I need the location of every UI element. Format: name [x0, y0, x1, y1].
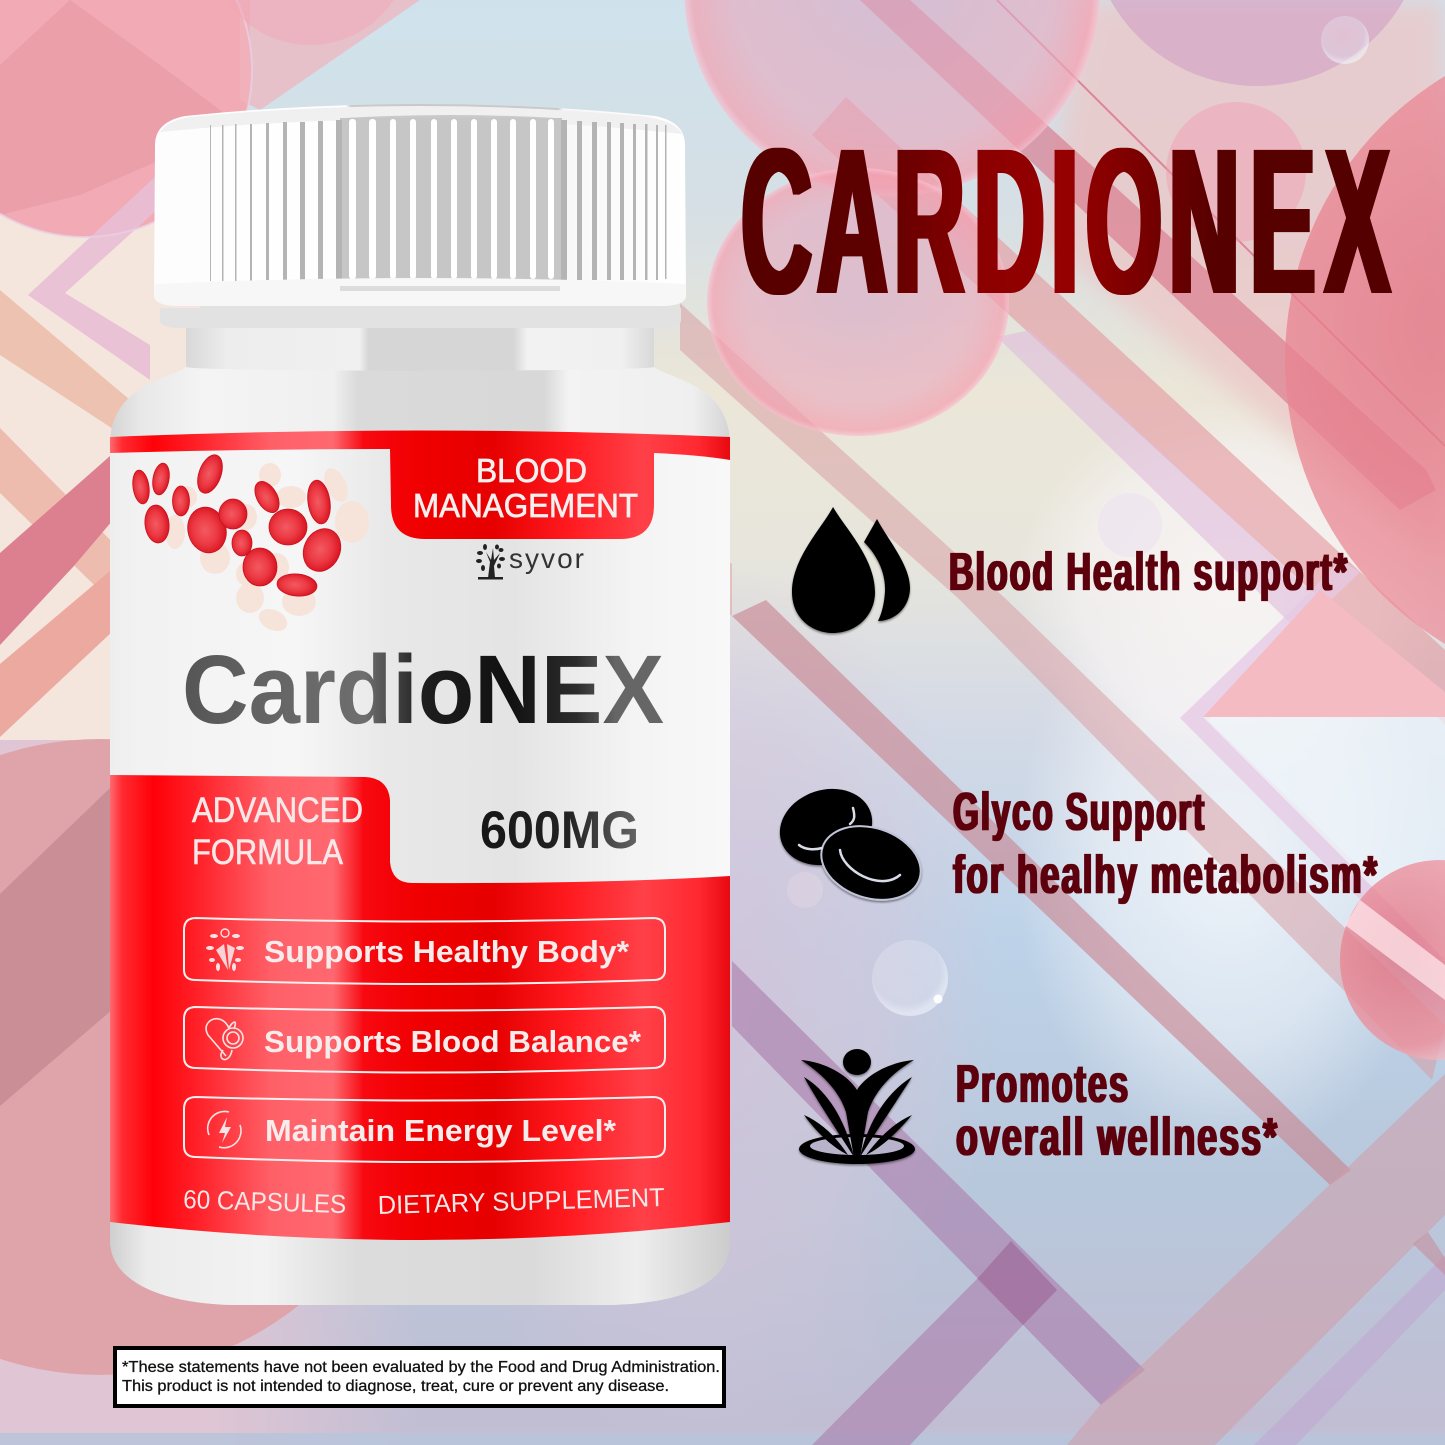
brand logo: syvor: syvor [509, 543, 584, 574]
icon: wellness figure [799, 1049, 915, 1164]
badge text: advanced formula: FORMULA [192, 833, 344, 872]
icon: blood drops [792, 507, 910, 633]
capsule count: 60 CAPSULES [183, 1184, 347, 1219]
product name: CardioNEX [182, 635, 664, 744]
benefit row: healthy body [184, 918, 665, 984]
icon: red blood cells [770, 777, 932, 913]
feature: overall wellness: Promotes [956, 1054, 1130, 1114]
benefit row: blood balance: Supports Blood Balance* [264, 1024, 642, 1059]
benefit row: energy level: Maintain Energy Level* [265, 1113, 617, 1148]
feature: glyco support: Glyco Support [953, 782, 1206, 842]
icon: heart with gauge [206, 1019, 243, 1060]
icon: figure with leaves [206, 929, 244, 971]
benefit row: energy level [184, 1097, 665, 1162]
badge text: blood management: MANAGEMENT [413, 487, 638, 524]
bottle body [110, 328, 730, 1305]
feature: overall wellness [956, 1054, 1279, 1167]
label top red band [110, 430, 730, 539]
icon: tree [476, 544, 505, 580]
benefit row: blood balance [184, 1007, 665, 1072]
benefit row: healthy body: Supports Healthy Body* [264, 934, 630, 969]
cap ribs [349, 119, 554, 279]
dietary supplement: DIETARY SUPPLEMENT [377, 1182, 665, 1220]
product bottle [110, 104, 730, 1305]
feature: glyco support [953, 782, 1379, 905]
label white panel [110, 440, 730, 885]
badge text: advanced formula [192, 791, 363, 872]
badge text: advanced formula: ADVANCED [192, 791, 363, 830]
brand logo: syvor [476, 543, 584, 580]
bubbles [0, 0, 1445, 1060]
title: CARDIONEX [741, 106, 1390, 338]
badge text: blood management: BLOOD [476, 452, 587, 489]
label lower red panel [110, 775, 730, 1240]
icon: lightning cycle [208, 1111, 241, 1148]
blood cells illustration [131, 451, 369, 635]
disclaimer box [115, 1348, 724, 1406]
badge text: blood management [413, 452, 638, 524]
bottle base [110, 1215, 730, 1305]
disclaimer box: This product is not intended to diagnose, treat, cure or prevent any disease. [122, 1378, 669, 1395]
neck ring [160, 308, 681, 328]
disclaimer box: *These statements have not been evaluated by the Food and Drug Administration. [122, 1359, 720, 1376]
feature: overall wellness: overall wellness* [956, 1107, 1279, 1167]
dosage: 600MG [480, 801, 639, 860]
bottle cap [154, 104, 686, 306]
bottle neck [186, 322, 654, 371]
